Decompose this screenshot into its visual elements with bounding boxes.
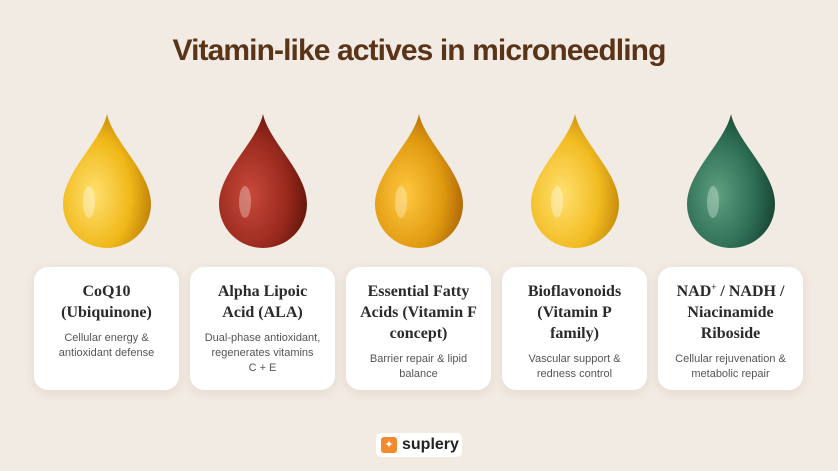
card: CoQ10: (Ubiquinone) <box>61 304 152 321</box>
logo <box>376 433 462 457</box>
card: Bioflavonoids: family) <box>550 325 599 342</box>
card: CoQ10 <box>34 267 179 390</box>
card: Bioflavonoids: Vascular support & <box>528 353 621 365</box>
card: EFA: Essential Fatty <box>368 283 469 300</box>
card: EFA: Acids (Vitamin F <box>360 304 477 321</box>
drop 5 <box>687 114 775 248</box>
card: NAD: Cellular rejuvenation & <box>675 353 786 365</box>
drop 1 <box>63 114 151 248</box>
drop 4 <box>531 114 619 248</box>
logo: suplery <box>402 436 459 453</box>
card: ALA: C + E <box>249 362 276 374</box>
card: EFA <box>346 267 491 390</box>
card: ALA: Acid (ALA) <box>222 304 303 321</box>
card: NAD <box>658 267 803 390</box>
card: ALA: Alpha Lipoic <box>218 283 307 300</box>
drop 3 <box>375 114 463 248</box>
card: CoQ10: Cellular energy & <box>64 332 149 344</box>
card: Bioflavonoids: Bioflavonoids <box>528 283 621 300</box>
card: NAD: Niacinamide <box>687 304 774 321</box>
card: EFA: concept) <box>390 325 447 342</box>
title: Vitamin-like actives in microneedling <box>172 34 666 67</box>
icon: logo mark: ✦ <box>384 439 394 451</box>
card: ALA <box>190 267 335 390</box>
card: Bioflavonoids: (Vitamin P <box>537 304 612 321</box>
card: EFA: Barrier repair & lipid <box>370 353 467 365</box>
card: ALA: Dual-phase antioxidant, <box>205 332 320 344</box>
drop 2 <box>219 114 307 248</box>
card: Bioflavonoids <box>502 267 647 390</box>
card: Bioflavonoids: redness control <box>537 368 612 380</box>
card: NAD: Riboside <box>701 325 760 342</box>
card: NAD: NAD+ / NADH / <box>677 282 784 300</box>
card: CoQ10: antioxidant defense <box>59 347 154 359</box>
icon: logo mark <box>381 437 397 453</box>
card: ALA: regenerates vitamins <box>211 347 314 359</box>
card: EFA: balance <box>399 368 438 380</box>
card: NAD: metabolic repair <box>691 368 770 380</box>
card: CoQ10: CoQ10 <box>82 283 130 300</box>
